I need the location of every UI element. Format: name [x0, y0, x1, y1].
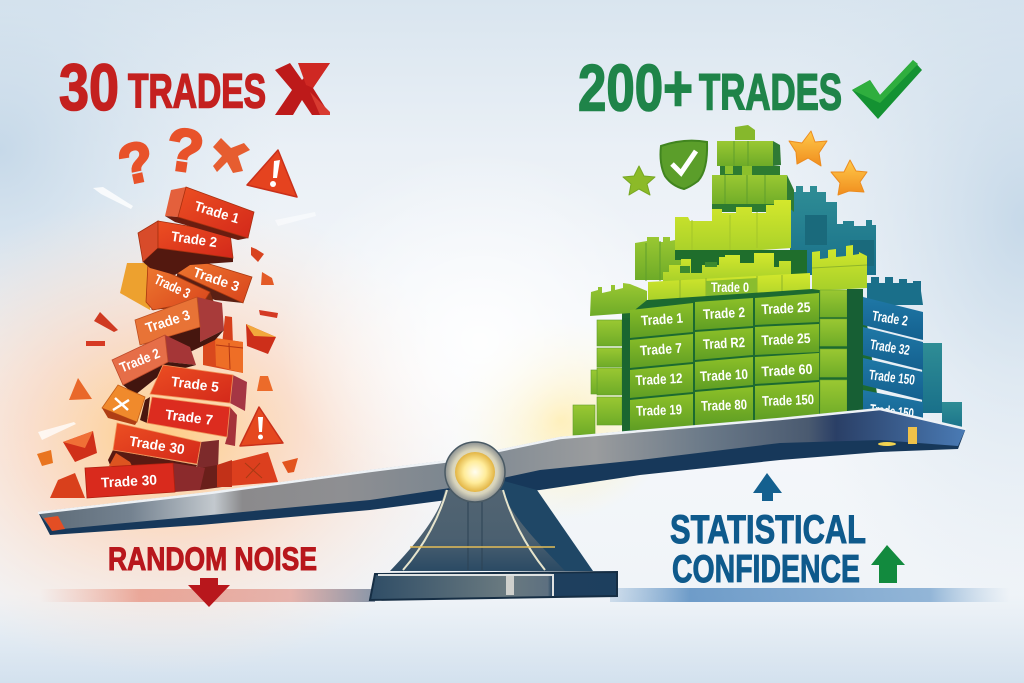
green trade grid: Trade 12	[635, 370, 683, 388]
panel: green castle of blocks	[573, 125, 962, 435]
icons: question marks, x and warning above the pile	[113, 115, 297, 197]
brick: Trade 5	[150, 365, 247, 411]
blue trade column: Trade 2	[871, 307, 909, 329]
heading: 200+ trades: TRADES	[699, 64, 842, 120]
icon: warning triangle	[240, 407, 283, 446]
green trade grid: Trade 2	[703, 304, 746, 322]
brick: Trade 1: Trade 1	[193, 198, 242, 226]
far right blue blocks	[922, 343, 962, 432]
brick: Trade 30 bottom: Trade 30	[101, 472, 158, 490]
debris	[37, 247, 298, 473]
floor shadow: right blue	[610, 588, 1010, 602]
panel: falling brick pile	[37, 187, 298, 498]
label: statistical confidence	[670, 508, 866, 591]
arrow: blue up	[753, 473, 782, 501]
brick: Trade 2 tilted	[112, 335, 196, 395]
green trade grid: Trad R2	[703, 334, 746, 352]
heading: 30 trades: TRADES	[128, 66, 266, 118]
top blocks	[712, 125, 794, 212]
icon: orange star large	[789, 131, 827, 166]
green trade grid	[630, 293, 819, 430]
label: statistical confidence: STATISTICAL	[670, 508, 866, 552]
Trade 0 lime row	[648, 273, 810, 303]
brick: Trade 1	[165, 187, 254, 240]
dark backing	[622, 289, 880, 434]
base	[370, 572, 617, 600]
icon: green check	[852, 60, 922, 119]
green trade grid: Trade 19	[636, 401, 682, 419]
blue trade column: Trade 150	[868, 366, 916, 388]
block: bottom right with x	[200, 452, 278, 490]
seesaw fulcrum	[370, 442, 617, 600]
brick: Trade 7	[140, 397, 237, 446]
brick: Trade 3 cut off, orange: Trade 3	[152, 271, 193, 301]
debris: lump bottom left	[50, 473, 85, 498]
brick: Trade 7: Trade 7	[164, 406, 214, 428]
blue trade column: Trade 150	[869, 401, 915, 421]
icon: shield with check	[660, 141, 707, 189]
icons: question marks, x and warning above the pile: ?	[162, 115, 208, 186]
brick: Trade 5: Trade 5	[170, 373, 220, 395]
brick: Trade 3 cut off, orange	[120, 263, 215, 310]
arrow: red down	[188, 578, 230, 607]
pivot head	[445, 442, 505, 502]
green trade grid: Trade 60	[761, 361, 813, 379]
label: statistical confidence: CONFIDENCE	[672, 548, 860, 591]
brick: Trade 2	[138, 221, 233, 275]
heading: 200+ trades: 200+	[578, 50, 693, 124]
brick: Trade 3 tilted	[135, 297, 224, 352]
brick: Trade 3 right: Trade 3	[191, 264, 242, 294]
block: under small orange	[109, 453, 132, 466]
green trade grid: Trade 25	[761, 299, 811, 317]
seesaw beam	[38, 408, 966, 535]
green trade grid: Trade 10	[700, 366, 749, 384]
left castle tower	[573, 283, 647, 435]
middle crenels	[663, 253, 791, 283]
mid dark gap band	[672, 250, 807, 280]
glowing pivot	[455, 452, 495, 492]
brick: Trade 3 right	[168, 255, 252, 303]
icon: red X	[275, 63, 330, 115]
motion streaks	[38, 187, 316, 440]
heading: 30 trades	[59, 50, 266, 124]
stand front	[390, 490, 565, 571]
teal tower at back	[790, 186, 923, 305]
icon: green star	[623, 166, 655, 195]
brick: Trade 3 tilted: Trade 3	[143, 306, 192, 336]
brick: Trade 2: Trade 2	[170, 228, 218, 250]
blue trade column: Trade 32	[869, 336, 911, 358]
heading: 200+ trades	[578, 50, 842, 124]
green trade grid: Trade 1	[640, 310, 684, 328]
back orange block	[203, 316, 243, 373]
right column of green blocks	[820, 289, 863, 419]
brick: Trade 2 tilted: Trade 2	[117, 345, 162, 375]
floor shadow: left red	[40, 589, 375, 602]
label: random noise: RANDOM NOISE	[108, 541, 317, 577]
big yellow-lime tier	[675, 200, 791, 256]
arrow: green up	[871, 545, 905, 583]
brick: Trade 30 upper: Trade 30	[128, 433, 186, 457]
brick: orange with x	[102, 385, 145, 425]
icons: question marks, x and warning above the pile: ?	[113, 128, 159, 197]
right top tower	[812, 245, 867, 291]
icon: orange star small	[831, 160, 867, 195]
left mid tower	[635, 237, 683, 281]
Trade 0 lime row: Trade 0	[711, 279, 749, 295]
green trade grid: Trade 150	[762, 391, 814, 409]
brick: Trade 30 bottom	[85, 463, 205, 498]
heading: 30 trades: 30	[59, 50, 119, 124]
green trade grid: Trade 7	[639, 340, 683, 358]
green trade grid: Trade 25	[761, 330, 811, 348]
stand right side	[500, 480, 593, 571]
blue trade column	[863, 297, 923, 428]
green trade grid: Trade 80	[701, 396, 747, 414]
brick: Trade 30 upper	[108, 423, 219, 470]
